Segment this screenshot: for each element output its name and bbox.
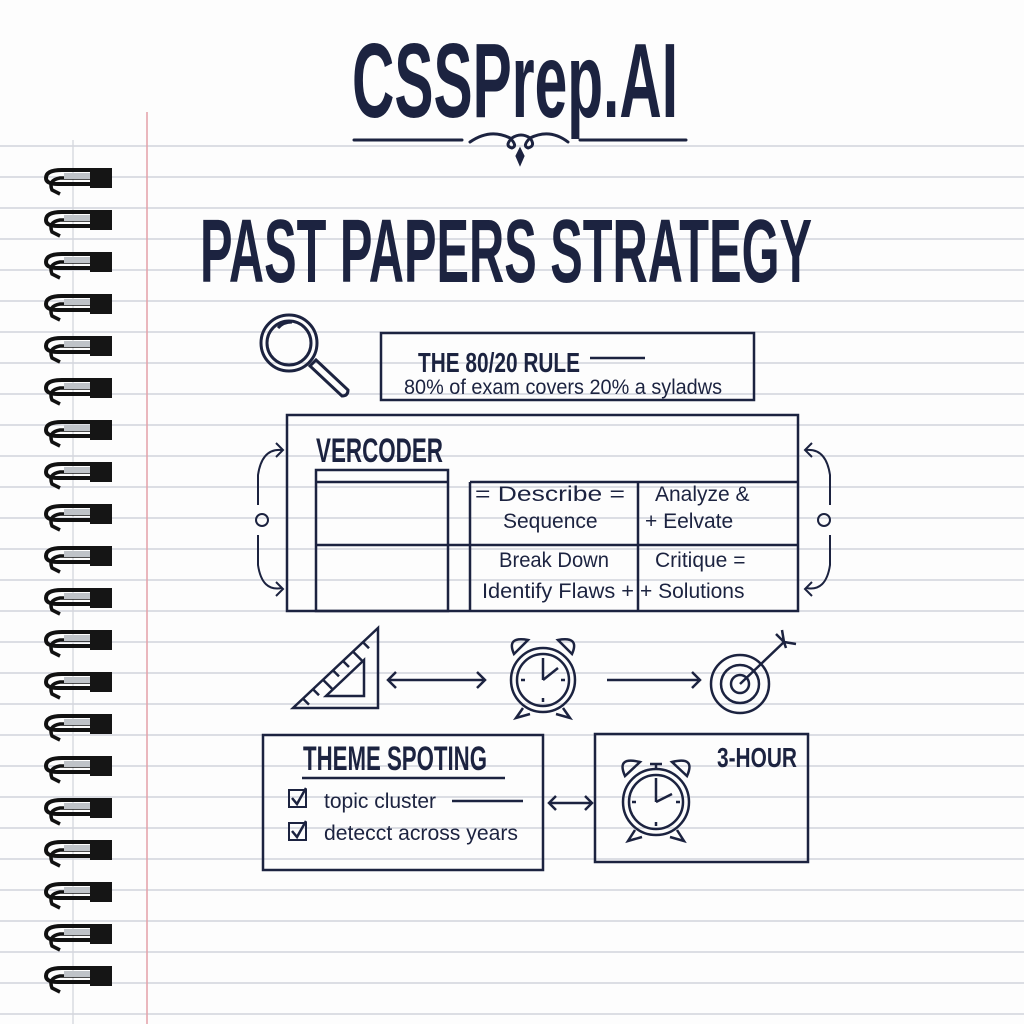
- panel: vercoder table: Break Down: [499, 549, 609, 572]
- arrow: double small: [549, 796, 592, 810]
- panel: theme spotting: detecct across years: [324, 822, 518, 845]
- arrow: right: [607, 672, 700, 688]
- icon: alarm clock: [511, 639, 575, 718]
- panel: vercoder table: VERCODER: [316, 432, 443, 470]
- panel: 3-hour: 3-HOUR: [717, 742, 797, 773]
- ornament: [354, 134, 686, 163]
- panel: vercoder table: + Solutions: [640, 580, 744, 603]
- panel: vercoder table: + Eelvate: [645, 510, 733, 533]
- bracket arrows left: [256, 443, 283, 596]
- icon: set square: [293, 628, 378, 708]
- icon: magnifier: [261, 315, 348, 396]
- panel: theme spotting: topic cluster: [324, 790, 436, 813]
- panel: 80/20 rule: THE 80/20 RULE: [418, 347, 580, 378]
- panel: vercoder table: [287, 415, 798, 611]
- panel: theme spotting: THEME SPOTING: [303, 740, 487, 778]
- bracket arrows right: [805, 443, 830, 596]
- panel: vercoder table: Critique =: [655, 549, 745, 572]
- icon: target: [711, 630, 796, 713]
- panel: vercoder table: Analyze &: [655, 483, 750, 506]
- panel: vercoder table: = Describe =: [475, 483, 625, 506]
- arrow: double: [388, 672, 485, 688]
- title: CSSPrep.AI: [352, 22, 678, 140]
- panel: 80/20 rule: [381, 333, 754, 400]
- panel: 3-hour: [595, 734, 808, 862]
- panel: theme spotting: [263, 735, 543, 870]
- panel: vercoder table: Sequence: [503, 510, 598, 533]
- spiral binding: [46, 168, 112, 992]
- panel: vercoder table: Identify Flaws +: [482, 580, 634, 603]
- panel: 80/20 rule: 80% of exam covers 20% a syladws: [404, 376, 722, 399]
